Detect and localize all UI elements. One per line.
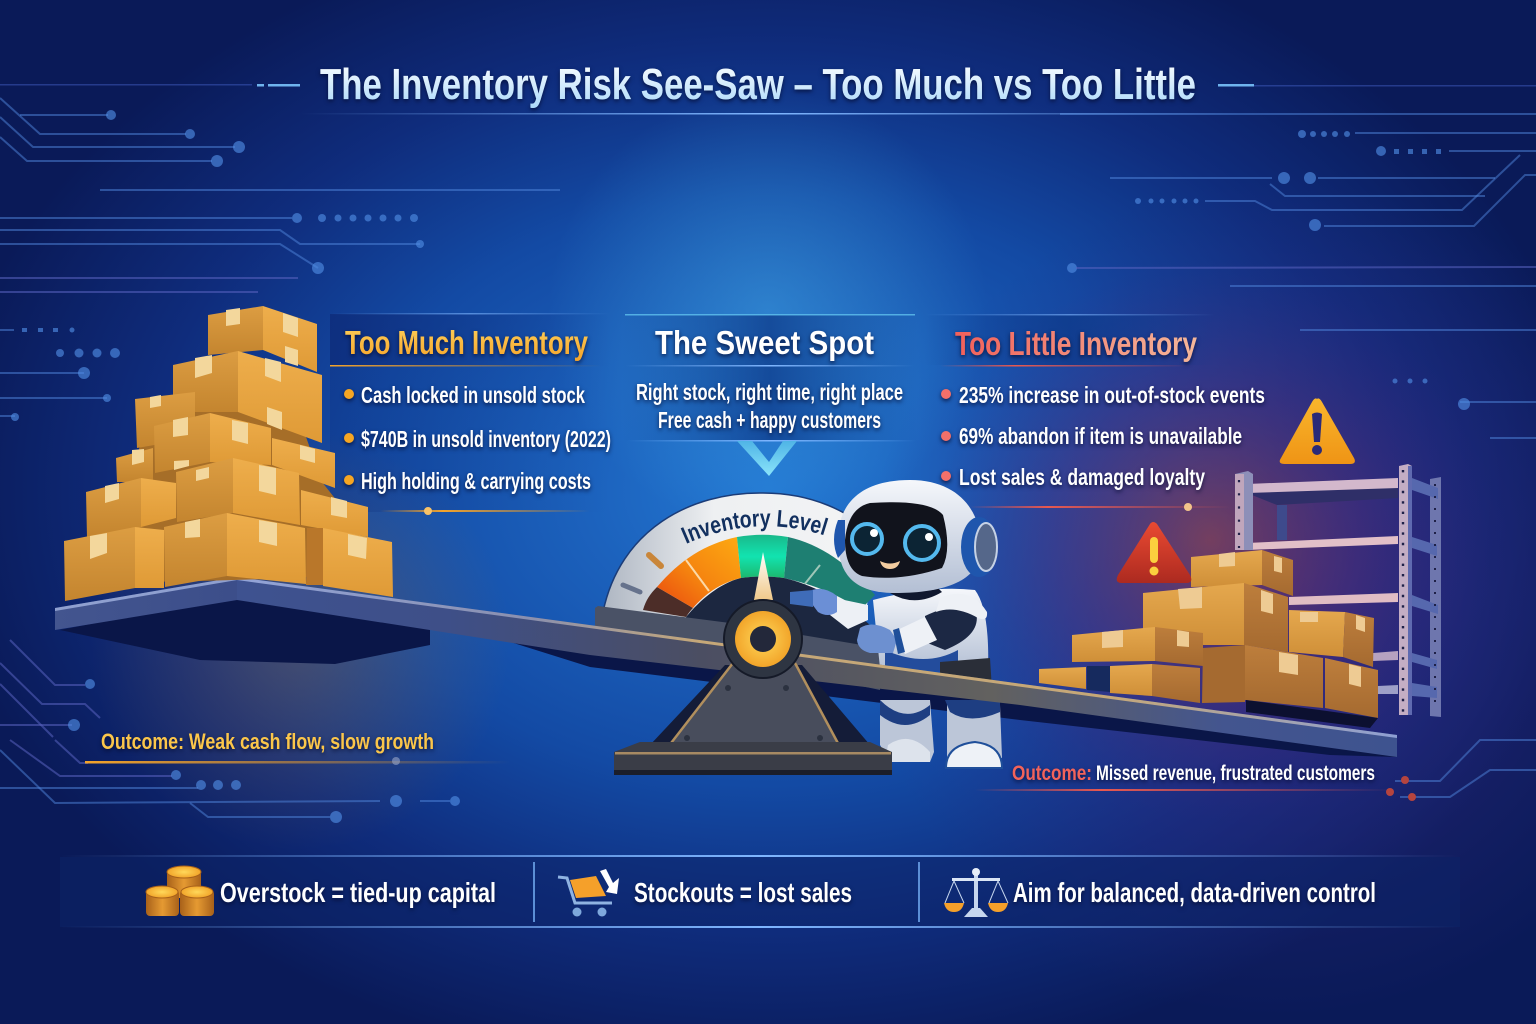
outcome: too much bbox=[85, 729, 510, 765]
sweet spot description: Free cash + happy customers bbox=[658, 407, 881, 433]
circuit decoration: lower right bbox=[1386, 740, 1536, 801]
bullet list: too much: High holding & carrying costs bbox=[361, 468, 591, 494]
right pile of boxes bbox=[1039, 550, 1378, 728]
seesaw beam bbox=[55, 577, 1397, 757]
text: overstock: Overstock = tied-up capital bbox=[220, 877, 496, 908]
outcome: too little: Outcome: bbox=[1012, 762, 1092, 785]
heading: sweet spot: The Sweet Spot bbox=[655, 324, 874, 361]
gauge bbox=[595, 492, 880, 690]
left platform front face bbox=[55, 577, 237, 630]
bullet list: too much: $740B in unsold inventory (2022) bbox=[361, 426, 611, 452]
heading: too much inventory: Too Much Inventory bbox=[345, 324, 588, 361]
bullet list: too little: Lost sales & damaged loyalty bbox=[959, 464, 1205, 490]
title: The Inventory Risk See-Saw – Too Much vs Too Little bbox=[320, 60, 1196, 109]
panel: the sweet spot bbox=[622, 314, 918, 476]
robot torso bbox=[873, 585, 992, 690]
bullet list: too little: 235% increase in out-of-stock events bbox=[959, 382, 1265, 408]
robot mouth bbox=[880, 561, 900, 569]
shelving unit bbox=[1235, 464, 1441, 717]
bottom summary bar bbox=[60, 855, 1460, 928]
fulcrum base bbox=[614, 742, 892, 775]
bullet list: too much bbox=[344, 382, 611, 494]
text: stockouts: Stockouts = lost sales bbox=[634, 877, 852, 908]
gauge tick marks bbox=[623, 555, 661, 592]
panel: too little inventory bbox=[925, 314, 1265, 511]
gauge title: Inventory Level bbox=[680, 510, 828, 544]
text: aim for balance: Aim for balanced, data-driven control bbox=[1013, 877, 1376, 908]
outcome: too little: Missed revenue, frustrated customers bbox=[1096, 762, 1375, 785]
panel: too much inventory bbox=[330, 313, 611, 515]
icon: coins bbox=[146, 866, 214, 916]
robot ear bbox=[834, 517, 997, 577]
circuit decoration: upper left bbox=[0, 98, 560, 421]
beam right face bbox=[237, 577, 1397, 757]
bullet list: too much: Cash locked in unsold stock bbox=[361, 382, 585, 408]
pivot hub bbox=[724, 600, 802, 678]
robot head and arms bbox=[790, 480, 997, 654]
robot legs bbox=[880, 700, 1002, 768]
outcome: too much: Outcome: Weak cash flow, slow growth bbox=[101, 729, 434, 754]
icon: shopping cart bbox=[558, 869, 619, 916]
robot face bbox=[845, 502, 947, 578]
icon: orange warning triangle bbox=[1280, 398, 1355, 464]
circuit decoration: upper right bbox=[1060, 114, 1536, 438]
outcome: too little bbox=[975, 762, 1395, 791]
seesaw underside shadow bbox=[60, 595, 1397, 757]
robot eyes bbox=[852, 524, 939, 560]
robot mascot bbox=[873, 585, 1002, 768]
arrow: pointer to gauge bbox=[737, 441, 797, 476]
robot arms bbox=[790, 589, 987, 654]
gauge base plate bbox=[595, 606, 880, 690]
gauge colour band bbox=[643, 535, 875, 660]
icon: red warning triangle bbox=[1117, 522, 1191, 583]
robot head bbox=[838, 480, 981, 593]
heading: too little inventory: Too Little Inventory bbox=[955, 325, 1198, 362]
gauge needle bbox=[754, 552, 773, 600]
sweet spot description bbox=[636, 379, 903, 433]
left pile of boxes bbox=[64, 306, 393, 601]
sweet spot description: Right stock, right time, right place bbox=[636, 379, 903, 405]
bullet list: too little: 69% abandon if item is unavailable bbox=[959, 423, 1242, 449]
bullet list: too little bbox=[941, 382, 1265, 490]
circuit decoration: lower left bbox=[0, 640, 460, 823]
icon: balance scale bbox=[944, 868, 1008, 917]
gauge outer arc bbox=[603, 493, 880, 640]
fulcrum stand bbox=[614, 660, 892, 775]
